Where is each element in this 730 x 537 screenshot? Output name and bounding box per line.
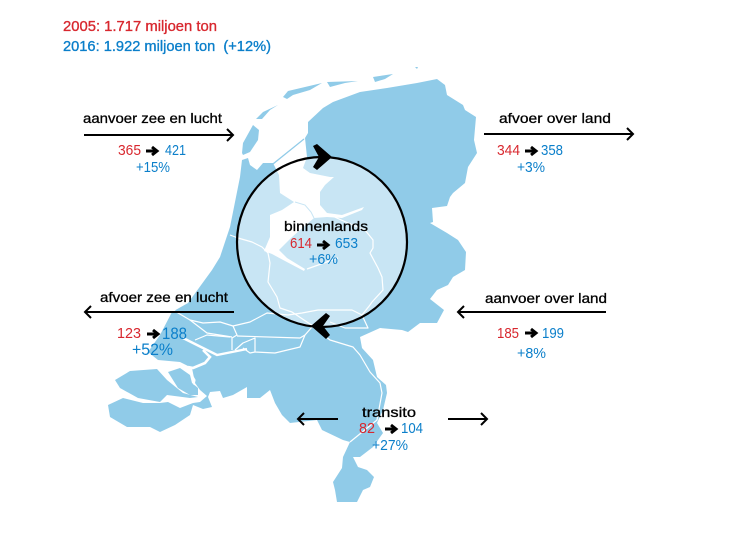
flow: aanvoer over land: aanvoer over land: [485, 290, 607, 306]
flow: binnenlands: +6%: [309, 251, 338, 268]
flow: afvoer zee en lucht: [85, 289, 234, 359]
Houtribdijk: [295, 202, 314, 218]
flow: transito: transito: [362, 404, 416, 420]
flow: afvoer over land: 344: [497, 142, 520, 159]
flow: afvoer over land: [484, 110, 633, 176]
flow: afvoer over land: +3%: [517, 159, 545, 176]
circle: binnenlands: [237, 144, 407, 339]
flow: binnenlands: [284, 218, 368, 268]
flow: aanvoer zee en lucht: [83, 110, 233, 176]
Afsluitdijk: [273, 139, 304, 164]
flow: aanvoer zee en lucht: +15%: [136, 159, 170, 176]
flow: afvoer zee en lucht: +52%: [132, 340, 173, 359]
flow: aanvoer zee en lucht: 365: [118, 142, 141, 159]
flow: transito: 82: [359, 420, 375, 437]
flow: aanvoer zee en lucht: 421: [165, 142, 186, 159]
flow: afvoer zee en lucht: afvoer zee en lucht: [100, 289, 228, 305]
title: [63, 18, 271, 55]
Tholen island: [168, 368, 198, 395]
flow: binnenlands: 653: [335, 235, 358, 252]
flow: binnenlands: binnenlands: [284, 218, 368, 234]
flow: aanvoer zee en lucht: aanvoer zee en lucht: [83, 110, 222, 126]
flow: transito: 104: [401, 420, 423, 437]
title: 2005: 1.717 miljoen ton: [63, 18, 217, 35]
flow: transito: +27%: [372, 437, 408, 454]
flow: afvoer zee en lucht: 188: [162, 324, 187, 343]
Zeeland island: [115, 369, 198, 402]
map: Netherlands: [108, 67, 477, 502]
flow: aanvoer over land: [458, 290, 607, 362]
IJsselmeer water: [264, 138, 364, 271]
flow: aanvoer over land: 185: [497, 325, 519, 342]
rivers: [170, 215, 383, 442]
flow: afvoer zee en lucht: 123: [117, 325, 141, 342]
arrowhead: bottom: [311, 313, 330, 339]
flow: afvoer over land: 358: [541, 142, 563, 159]
arrowhead: top: [313, 144, 332, 170]
flow: binnenlands: 614: [290, 235, 312, 252]
flow: aanvoer over land: 199: [542, 325, 564, 342]
title: 2016: 1.922 miljoen ton (+12%): [63, 38, 271, 55]
mainland: [108, 79, 477, 502]
flow: afvoer over land: afvoer over land: [499, 110, 611, 126]
flow: aanvoer over land: +8%: [517, 345, 546, 362]
flow: transito: [298, 404, 487, 454]
Wadden islands: [242, 67, 418, 155]
